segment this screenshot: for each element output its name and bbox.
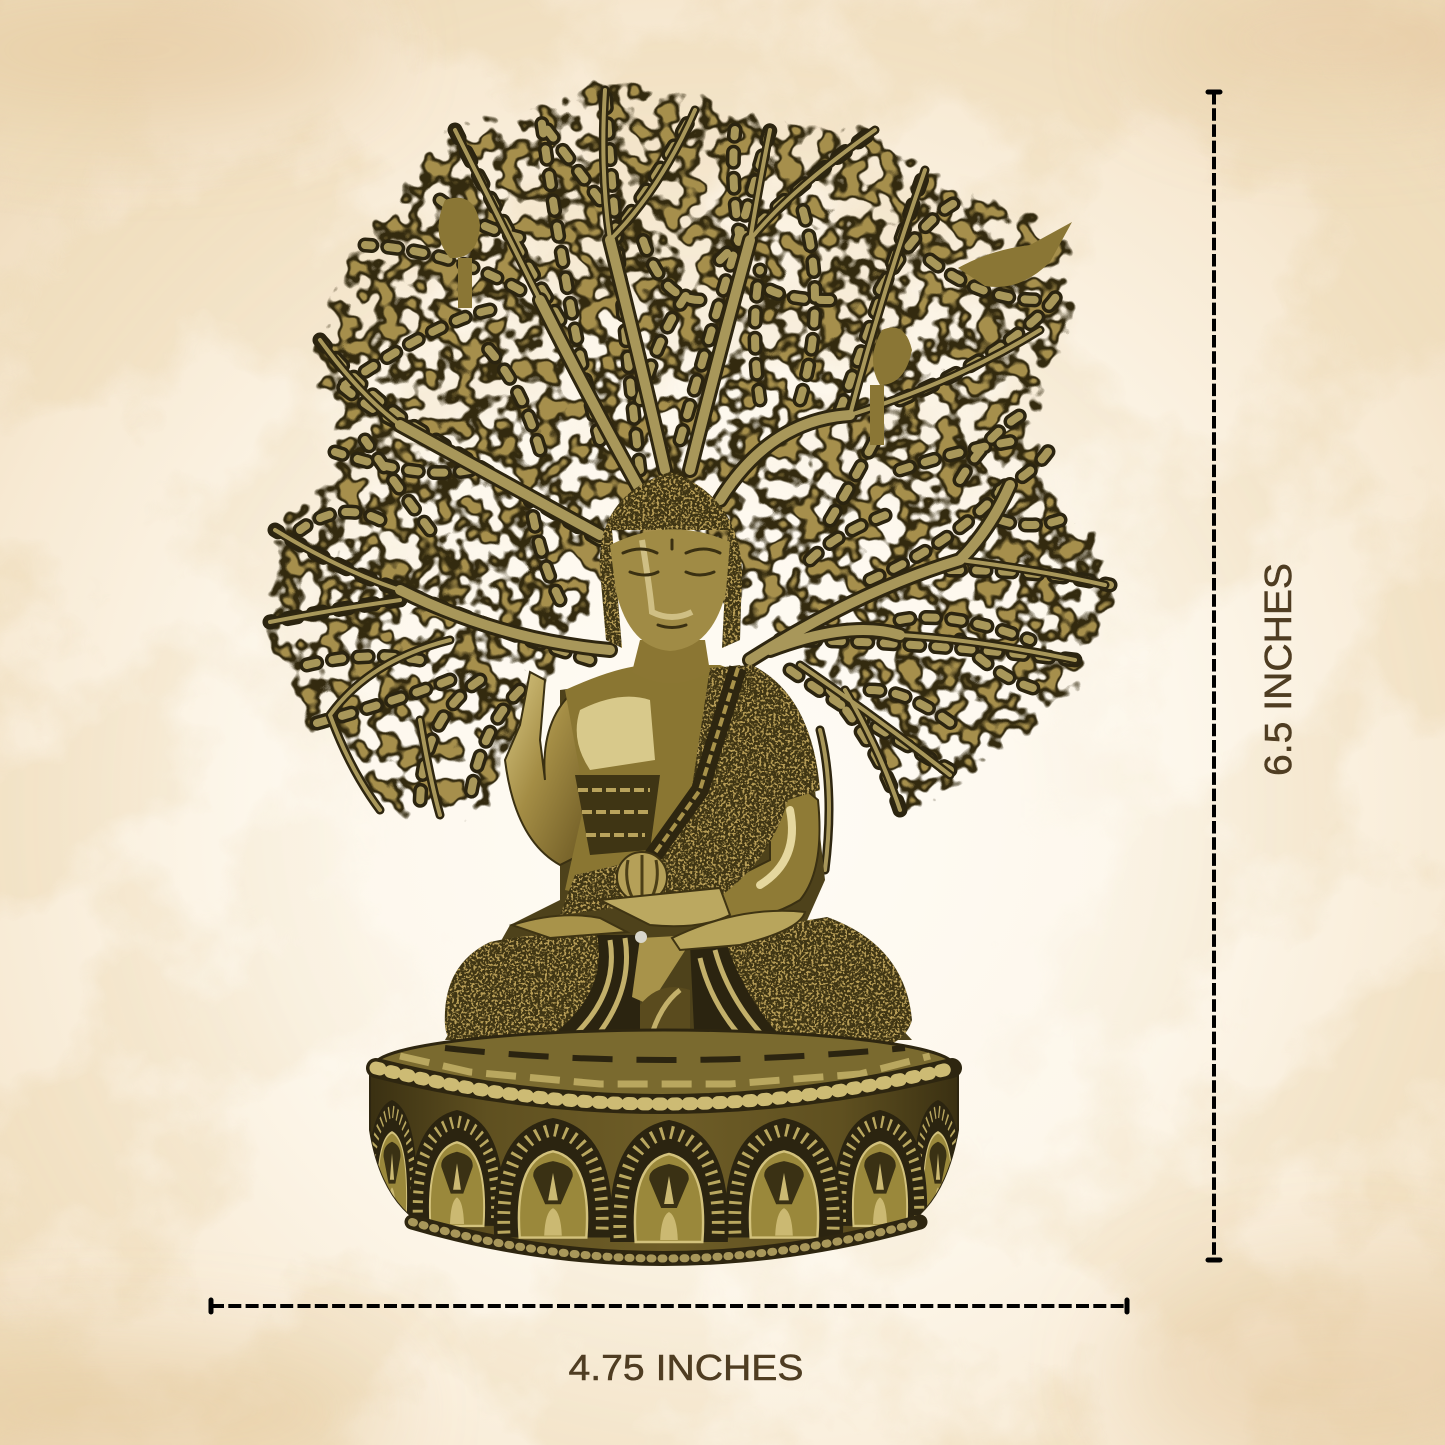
raised arm and hand bbox=[505, 672, 590, 865]
right arm bbox=[660, 760, 820, 921]
hands and crossed feet bbox=[512, 888, 805, 950]
bodhi tree bbox=[258, 72, 1122, 870]
tree leaves bbox=[270, 90, 1110, 810]
birds on the tree bbox=[439, 198, 1072, 445]
body backing bbox=[445, 665, 912, 1040]
head bbox=[600, 472, 742, 651]
height label: 6.5 INCHES bbox=[1258, 563, 1300, 776]
base top rim bbox=[374, 1030, 954, 1102]
crossed legs bbox=[445, 917, 912, 1058]
width dimension line bbox=[211, 1300, 1128, 1312]
height dimension line bbox=[1208, 92, 1220, 1260]
torso bbox=[565, 665, 770, 900]
base lotus body bbox=[367, 1075, 963, 1256]
tree branches bbox=[270, 90, 1105, 870]
bowl bbox=[617, 852, 667, 902]
width label: 4.75 INCHES bbox=[568, 1347, 804, 1388]
robe over shoulder bbox=[560, 665, 820, 915]
tree dense foliage bbox=[258, 72, 1122, 830]
Buddha figure bbox=[445, 472, 912, 1058]
base bead rows bbox=[376, 1068, 952, 1258]
neck bbox=[632, 640, 710, 684]
base petals bbox=[367, 1100, 963, 1242]
lotus base bbox=[367, 1030, 963, 1258]
